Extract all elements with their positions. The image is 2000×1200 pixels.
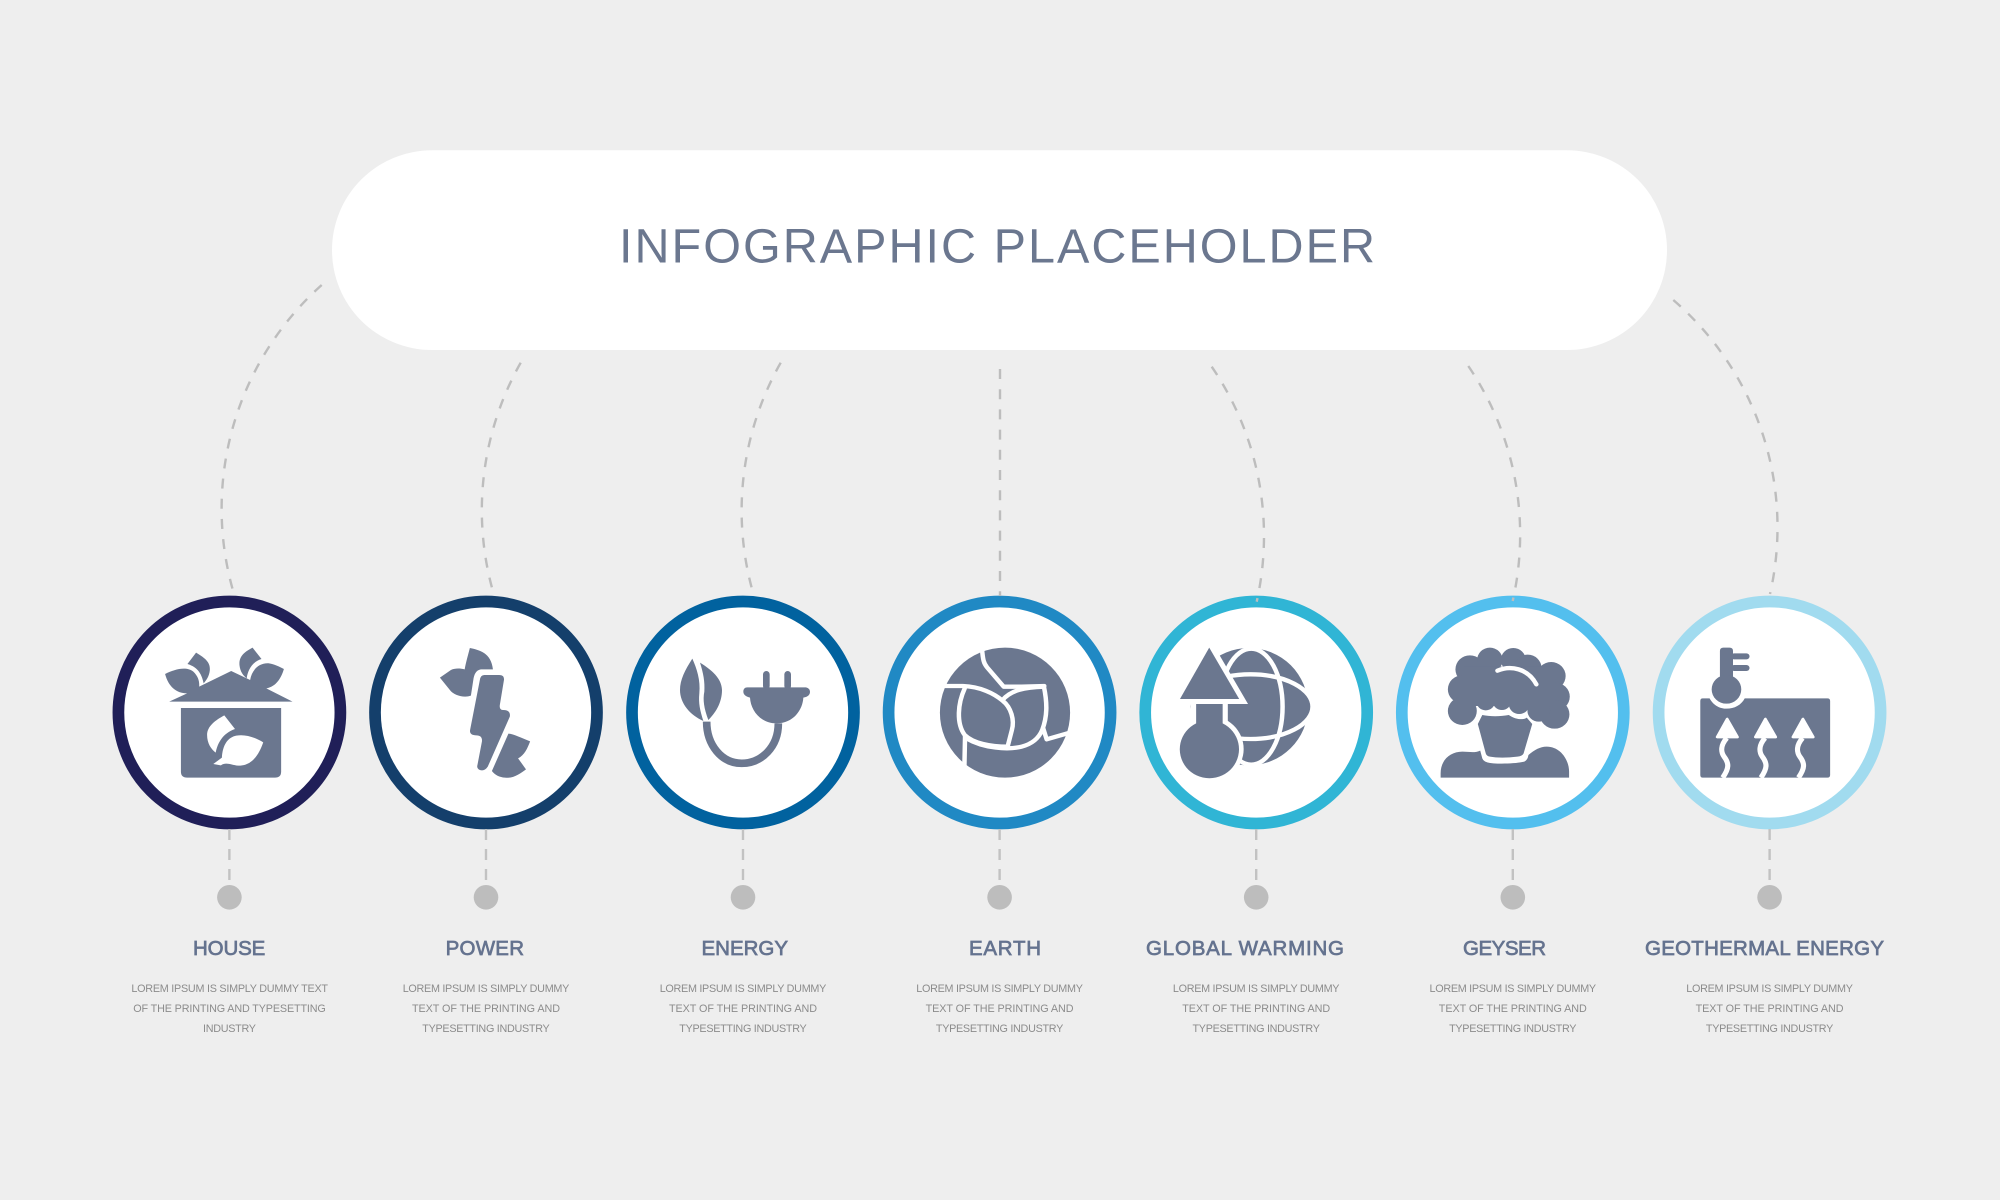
earth heading: EARTH: [969, 937, 1041, 960]
geyser dot: [1500, 885, 1525, 910]
panel: earth: [889, 602, 1111, 1035]
earth ring: [889, 602, 1111, 824]
geyser description: [1430, 983, 1596, 1035]
power stem: [485, 829, 487, 880]
house dot: [217, 885, 242, 910]
geothermal description: [1686, 983, 1853, 1035]
icon: globe with thermometer: [1175, 648, 1313, 782]
house description: INDUSTRY: [203, 1023, 256, 1035]
energy stem: [742, 829, 744, 880]
house description: [131, 983, 328, 1035]
geyser description: TEXT OF THE PRINTING AND: [1439, 1003, 1587, 1015]
power dot: [474, 885, 498, 910]
power description: LOREM IPSUM IS SIMPLY DUMMY: [403, 983, 569, 995]
icon: leaf and lightning bolt: [440, 648, 530, 778]
global warming stem: [1255, 829, 1257, 880]
geyser ring: [1402, 602, 1624, 824]
energy description: LOREM IPSUM IS SIMPLY DUMMY: [660, 983, 826, 995]
house description: OF THE PRINTING AND TYPESETTING: [133, 1003, 326, 1015]
icon: earth with leaves: [940, 648, 1073, 778]
geothermal description: LOREM IPSUM IS SIMPLY DUMMY: [1686, 983, 1853, 995]
global warming description: LOREM IPSUM IS SIMPLY DUMMY: [1173, 983, 1340, 995]
title: INFOGRAPHIC PLACEHOLDER: [619, 220, 1375, 274]
power description: TYPESETTING INDUSTRY: [422, 1023, 550, 1035]
earth description: LOREM IPSUM IS SIMPLY DUMMY: [916, 983, 1083, 995]
geothermal description: TYPESETTING INDUSTRY: [1706, 1023, 1833, 1035]
global warming description: TYPESETTING INDUSTRY: [1192, 1023, 1320, 1035]
global warming description: TEXT OF THE PRINTING AND: [1182, 1003, 1330, 1015]
house description: LOREM IPSUM IS SIMPLY DUMMY TEXT: [131, 983, 328, 995]
icon: leaf with plug: [680, 659, 810, 763]
panel: geyser: [1402, 602, 1624, 1035]
earth description: TEXT OF THE PRINTING AND: [926, 1003, 1074, 1015]
energy heading: ENERGY: [702, 937, 788, 960]
power ring: [375, 602, 597, 824]
geothermal description: TEXT OF THE PRINTING AND: [1696, 1003, 1844, 1015]
title pill panel: [332, 150, 1667, 350]
panel: energy: [632, 602, 854, 1035]
energy ring: [632, 602, 854, 824]
earth description: [916, 983, 1083, 1035]
geyser stem: [1512, 829, 1514, 880]
geyser heading: GEYSER: [1463, 937, 1546, 960]
house stem: [228, 829, 231, 880]
panel: house: [118, 602, 340, 1035]
global warming heading: GLOBAL WARMING: [1146, 937, 1344, 960]
earth dot: [987, 885, 1012, 910]
geyser description: TYPESETTING INDUSTRY: [1449, 1023, 1576, 1035]
geothermal dot: [1757, 885, 1782, 910]
geothermal stem: [1768, 829, 1771, 880]
dashed connectors from title pill to circles: [222, 285, 1778, 602]
earth stem: [998, 829, 1001, 880]
energy dot: [731, 885, 755, 910]
energy description: TYPESETTING INDUSTRY: [679, 1023, 807, 1035]
icon: geyser eruption: [1441, 648, 1570, 778]
earth description: TYPESETTING INDUSTRY: [936, 1023, 1063, 1035]
panel: power: [375, 602, 597, 1035]
global warming description: [1173, 983, 1340, 1035]
energy description: [660, 983, 826, 1035]
geyser description: LOREM IPSUM IS SIMPLY DUMMY: [1430, 983, 1596, 995]
geothermal ring: [1659, 602, 1881, 824]
icon: house with leaves: [165, 648, 293, 778]
icon: thermometer over ground with heat arrows: [1700, 648, 1830, 778]
house heading: HOUSE: [193, 937, 265, 960]
energy description: TEXT OF THE PRINTING AND: [669, 1003, 817, 1015]
geothermal heading: GEOTHERMAL ENERGY: [1645, 937, 1884, 960]
power heading: POWER: [446, 937, 524, 960]
house ring: [118, 602, 340, 824]
global warming dot: [1244, 885, 1268, 910]
global warming ring: [1145, 602, 1367, 824]
power description: [403, 983, 569, 1035]
power description: TEXT OF THE PRINTING AND: [412, 1003, 560, 1015]
panel: global warming: [1145, 602, 1367, 1035]
panel: geothermal energy: [1645, 602, 1884, 1035]
